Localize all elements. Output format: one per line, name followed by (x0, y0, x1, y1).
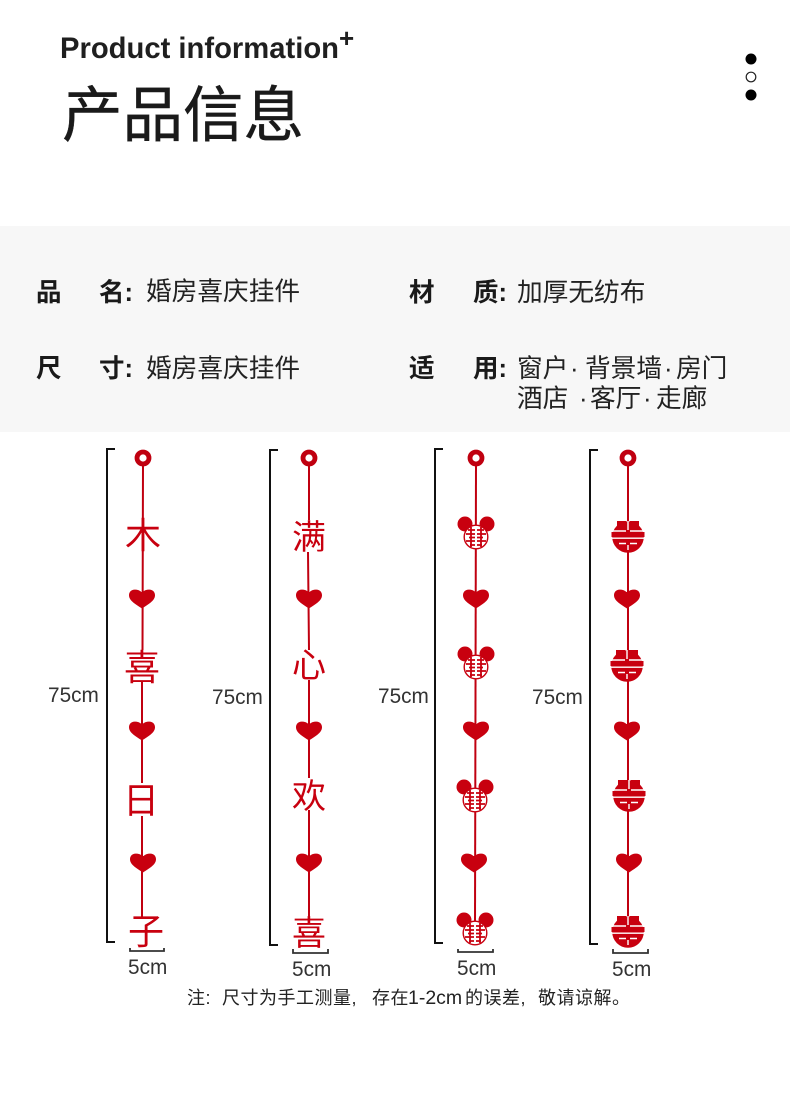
icon: hanging ring (622, 452, 634, 464)
label: height: 75cm (212, 686, 263, 709)
string (627, 464, 629, 925)
label: height: 75cm (532, 686, 583, 709)
height bracket (270, 450, 278, 945)
label: width: 5cm (128, 956, 167, 979)
string (475, 464, 476, 925)
character ornaments (123, 515, 164, 952)
spec: suitable places (409, 354, 727, 413)
footnote: 的误差, (465, 988, 526, 1008)
spec: product name (36, 277, 300, 307)
label: height: 75cm (378, 685, 429, 708)
heading: Chinese title: 产品信息 (62, 81, 304, 149)
spec: suitable places: 窗户 (517, 354, 568, 383)
hanging ornament 1: 木喜日子 (48, 449, 167, 979)
height bracket (107, 449, 115, 942)
footnote: 敬请谅解。 (538, 988, 630, 1008)
character ornaments: 日 (123, 780, 159, 821)
icon: hearts (296, 590, 322, 872)
character ornaments: 喜 (124, 647, 160, 688)
label: width: 5cm (612, 958, 651, 981)
footnote: 存在 (372, 988, 409, 1008)
spec: suitable places: 房门 (676, 354, 727, 383)
string (308, 464, 309, 918)
spec: suitable places: 客厅 (590, 384, 641, 413)
character ornaments: 心 (292, 647, 326, 685)
character ornaments: 喜 (292, 915, 326, 953)
hanging ornament 4: double happiness (532, 450, 651, 981)
spec: size: 尺 (36, 355, 62, 383)
label: width: 5cm (457, 957, 496, 980)
spec: product name: 婚房喜庆挂件 (146, 277, 300, 306)
hanging ornament 3: mouse double happiness (378, 449, 496, 980)
character ornaments (292, 519, 326, 953)
spec: suitable places: · (643, 385, 652, 413)
icon: hearts (129, 590, 156, 872)
icon: hanging ring (470, 452, 482, 464)
spec: suitable places: 背景墙 (585, 354, 662, 383)
spec: product name: 名: (99, 279, 133, 307)
string (142, 464, 143, 918)
spec: material (409, 278, 645, 307)
width bracket (613, 949, 648, 953)
spec: size: 寸: (99, 355, 133, 383)
icon: hearts (614, 590, 642, 872)
spec: suitable places: 酒店 (517, 384, 568, 413)
spec: material: 加厚无纺布 (517, 278, 645, 307)
footnote: 注: (187, 988, 211, 1008)
icon: double happiness emblems (610, 521, 646, 948)
footnote: 尺寸为手工测量, (222, 988, 357, 1008)
height bracket (435, 449, 443, 943)
icon: three dots menu (746, 54, 756, 100)
height bracket (590, 450, 598, 944)
icon: hanging ring (303, 452, 315, 464)
width bracket (130, 948, 164, 951)
spec: suitable places: · (579, 385, 588, 413)
width bracket (458, 949, 493, 952)
label: width: 5cm (292, 958, 331, 981)
spec: product name: 品 (36, 279, 62, 307)
character ornaments: 满 (292, 519, 326, 557)
icon: hearts (461, 590, 489, 872)
spec: suitable places: 适 (409, 355, 435, 383)
character ornaments: 木 (125, 515, 161, 556)
spec: material: 材 (409, 279, 435, 307)
hanging ornament 2: 满心欢喜 (212, 450, 331, 981)
character ornaments: 欢 (292, 778, 326, 816)
icon: plus mark: + (339, 23, 354, 53)
spec: suitable places: 走廊 (656, 384, 707, 413)
panel: product specifications (0, 226, 790, 432)
spec: material: 质: (473, 279, 507, 307)
label: height: 75cm (48, 684, 99, 707)
header: product information title (60, 23, 354, 149)
icon: hanging ring (137, 452, 149, 464)
width bracket (293, 949, 328, 953)
icon: mouse emblems (456, 516, 494, 945)
spec: suitable places: · (570, 355, 579, 383)
spec: size: 婚房喜庆挂件 (146, 354, 300, 383)
heading: English title: Product information (60, 32, 339, 65)
spec: suitable places: 用: (473, 355, 507, 383)
character ornaments: 子 (128, 911, 164, 952)
spec: size (36, 354, 300, 383)
footnote: 1-2cm (408, 987, 462, 1009)
spec: suitable places: · (664, 355, 673, 383)
